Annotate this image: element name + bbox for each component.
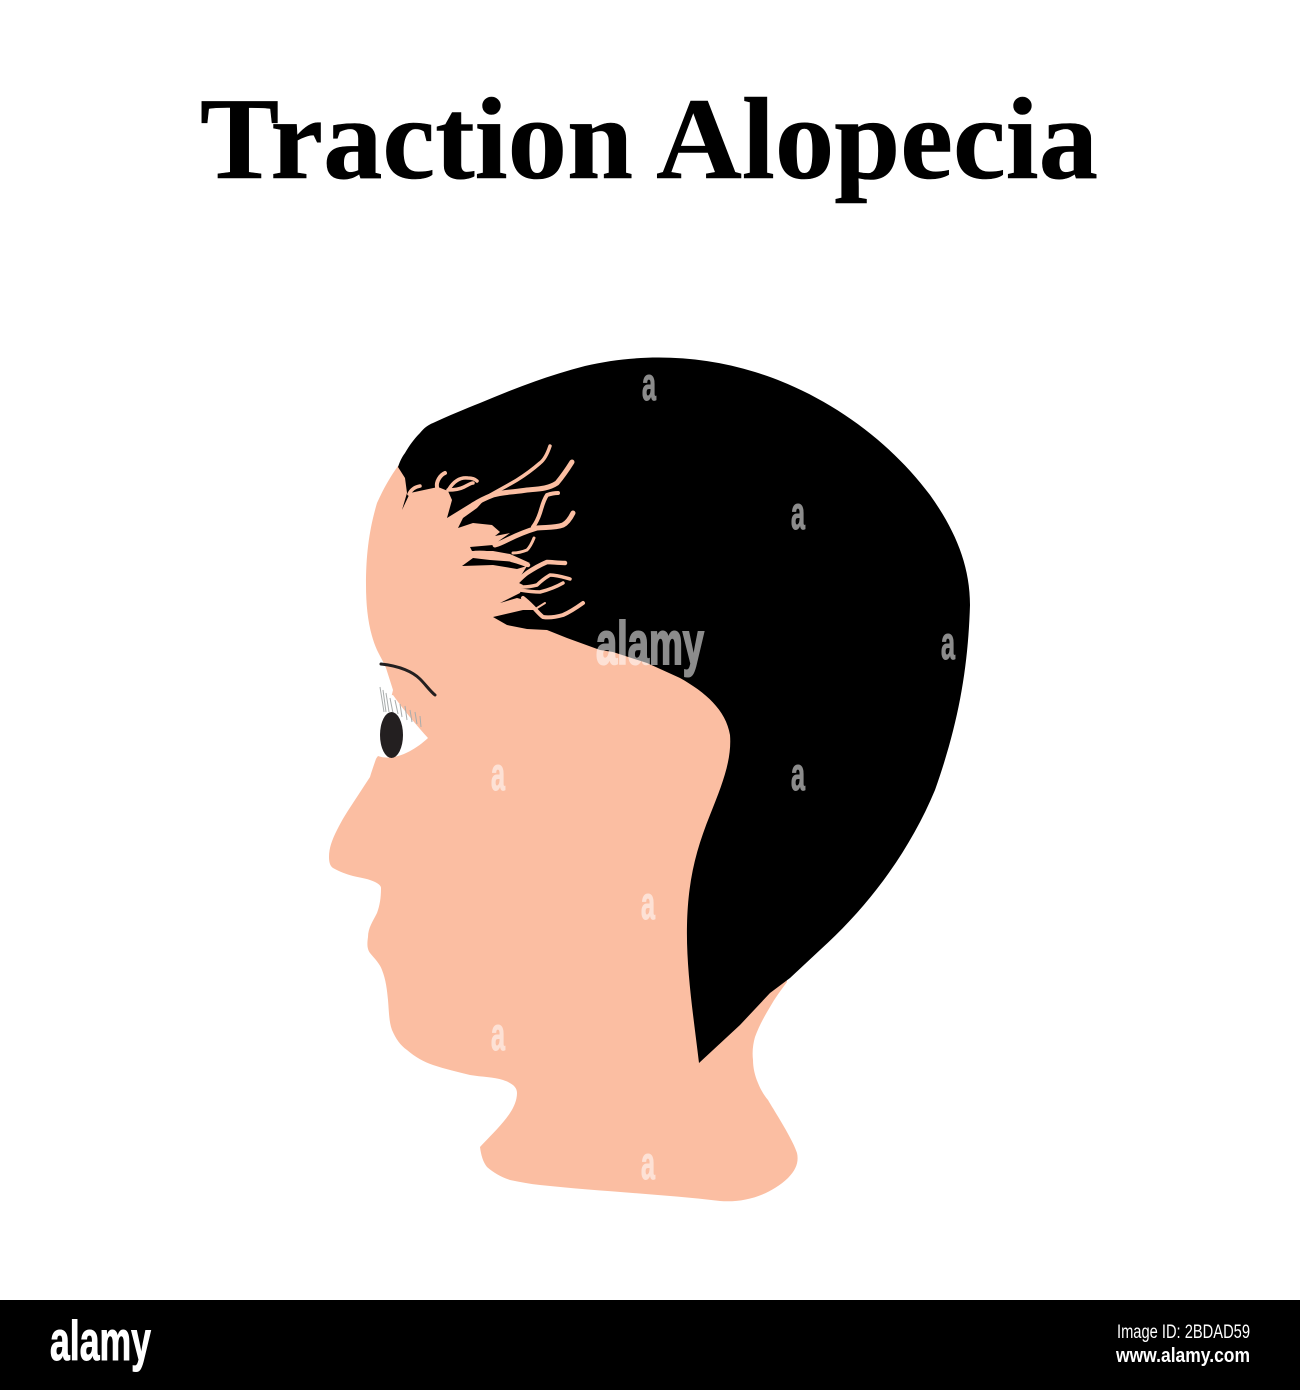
watermark: a <box>642 358 656 410</box>
watermark: a <box>791 748 805 800</box>
watermark: central logo: alamy <box>596 610 704 677</box>
watermark <box>491 358 955 1189</box>
image id: Image ID: 2BDAD59 <box>1117 1322 1250 1343</box>
bottom banner <box>0 1300 1300 1390</box>
watermark: a <box>491 748 505 800</box>
iris <box>380 712 403 758</box>
hair <box>398 358 970 1063</box>
eye white <box>360 695 428 780</box>
eyebrow <box>381 664 435 695</box>
website: www.alamy.com <box>1115 1345 1250 1367</box>
watermark: a <box>491 1008 505 1060</box>
watermark: a <box>791 487 805 539</box>
banner background <box>0 1300 1300 1390</box>
banner logo: alamy <box>50 1309 151 1372</box>
title: Traction Alopecia <box>200 75 1098 204</box>
eye <box>360 687 428 780</box>
watermark: a <box>641 1137 655 1189</box>
watermark: a <box>941 617 955 669</box>
watermark: a <box>641 877 655 929</box>
head illustration <box>329 358 970 1201</box>
eyelashes <box>380 687 421 727</box>
face and neck skin <box>329 440 798 1201</box>
hair wisps exposing skin <box>409 446 583 617</box>
